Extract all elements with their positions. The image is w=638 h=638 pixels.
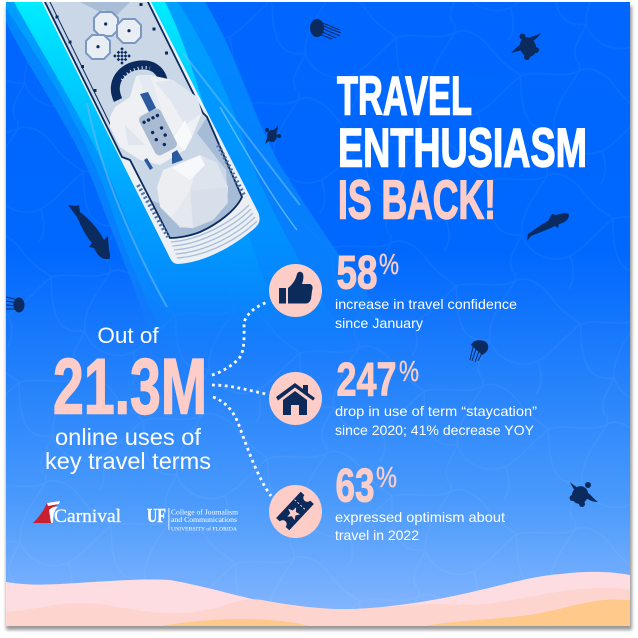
sand: golden left	[160, 619, 310, 626]
stat: 63%: %	[376, 462, 397, 494]
stat: 58%: 58	[336, 246, 378, 298]
funnel blocks	[140, 92, 183, 170]
stat: 63%: 63	[336, 458, 374, 512]
checker deck	[113, 47, 131, 65]
icon: ticket	[269, 485, 322, 538]
jellyfish: top	[310, 19, 341, 39]
callout: out of 21.3M: key travel terms	[45, 448, 211, 474]
stat: 63%	[335, 458, 505, 543]
logo: Carnival: Carnival	[54, 507, 121, 527]
dotted connectors	[212, 302, 271, 496]
icon: house	[269, 372, 322, 425]
stat: 247%	[335, 352, 538, 438]
fish: left	[68, 205, 110, 259]
jellyfish: right	[470, 340, 488, 362]
hull	[41, 0, 260, 264]
stat: 63%: expressed optimism about	[335, 510, 505, 525]
stat: 247%: drop in use of term “staycation”	[335, 404, 538, 419]
stat: 58%: increase in travel confidence	[335, 297, 517, 312]
main deck	[46, 2, 228, 228]
title	[337, 64, 587, 230]
icon: thumbs up	[269, 264, 322, 317]
stat: 58%: %	[379, 249, 399, 281]
fish: right	[527, 213, 569, 241]
title: IS BACK!	[338, 168, 496, 230]
stat: 247%: %	[399, 356, 419, 388]
callout: out of 21.3M: online uses of	[55, 424, 202, 450]
central structure	[139, 108, 177, 156]
logo: University of Florida: and Communications	[171, 515, 237, 524]
stat: 58%	[335, 246, 517, 331]
stat: 58%: since January	[335, 316, 423, 331]
ship wake	[6, 2, 372, 334]
portholes	[138, 145, 245, 237]
stat: 247%: 247	[336, 352, 396, 406]
deck square markers	[56, 3, 168, 92]
sand: golden right	[425, 600, 630, 626]
upper superstructure	[110, 75, 202, 165]
callout: out of 21.3M	[45, 323, 211, 474]
callout: out of 21.3M: 21.3M	[53, 342, 207, 430]
turtle: small	[265, 125, 281, 144]
logo: University of Florida: UF	[147, 505, 166, 527]
cruise ship	[41, 0, 260, 264]
stat: 247%: since 2020; 41% decrease YOY	[335, 423, 534, 438]
sand: pink	[6, 572, 630, 614]
turtle: top right	[511, 33, 541, 60]
callout: out of 21.3M: Out of	[97, 323, 159, 348]
stat: 63%: travel in 2022	[335, 528, 419, 543]
jellyfish: left	[6, 297, 24, 312]
logo: University of Florida: UNIVERSITY of FLORIDA	[171, 526, 237, 532]
pool decks	[86, 12, 141, 59]
title: TRAVEL	[337, 64, 472, 126]
arch	[115, 65, 163, 100]
logo: Carnival	[33, 501, 121, 527]
logo: University of Florida: College of Journalism	[171, 508, 238, 516]
lower dome	[157, 155, 228, 228]
stern stripes	[171, 205, 257, 258]
turtle: bottom right	[569, 482, 598, 507]
sand: peach	[6, 588, 630, 626]
logo: University of Florida	[147, 505, 238, 532]
